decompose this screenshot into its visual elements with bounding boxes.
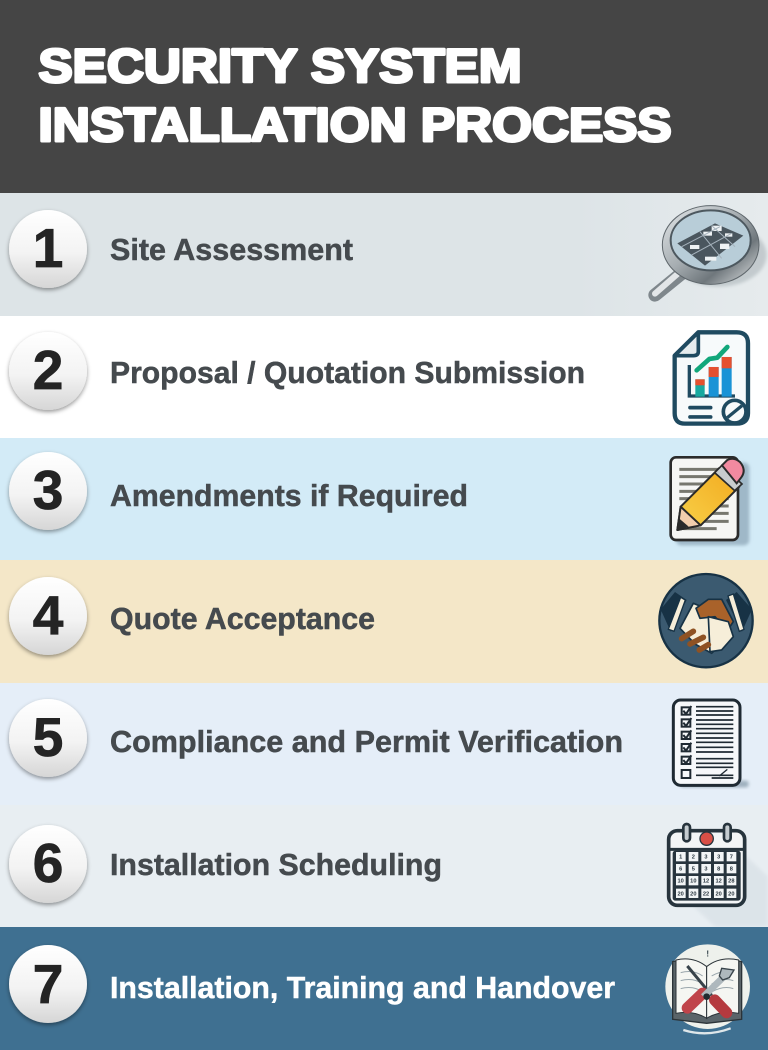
icon: calendar: 20 [690, 891, 696, 897]
icon: calendar: 28 [728, 879, 734, 885]
title: SECURITY SYSTEM [38, 39, 522, 92]
step 1 label: Site Assessment [110, 232, 353, 267]
icon: calendar: 20 [678, 891, 684, 897]
icon: calendar: 10 [678, 879, 684, 885]
icon: pencil on paper [671, 457, 749, 545]
step 3 number badge [9, 452, 87, 530]
icon: calendar: 10 [690, 879, 696, 885]
icon: calendar: 12 [703, 879, 709, 885]
step 1 number badge: 1 [33, 217, 63, 279]
icon: calendar: 20 [716, 891, 722, 897]
icon: calendar: 3 [717, 855, 720, 861]
step 7 label: Installation, Training and Handover [110, 970, 615, 1005]
step 5 number badge: 5 [33, 706, 63, 768]
icon: calendar: 2 [692, 855, 695, 861]
icon: document with bar chart [675, 332, 748, 424]
icon: calendar: 22 [703, 891, 709, 897]
step 2 number badge [9, 332, 87, 410]
panel: step 3 amendments [0, 438, 768, 560]
step 3 label: Amendments if Required [110, 478, 468, 513]
step 4 label: Quote Acceptance [110, 601, 375, 636]
icon: calendar [669, 824, 768, 927]
panel: step 4 quote acceptance [0, 560, 768, 683]
panel: step 7 installation [0, 927, 768, 1050]
icon: calendar: 6 [679, 867, 682, 873]
icon: calendar: 12 [716, 879, 722, 885]
icon: calendar: 8 [717, 867, 720, 873]
panel: step 1 site assessment [0, 193, 768, 316]
step 5 number badge [9, 699, 87, 777]
step 2 number badge: 2 [33, 339, 63, 401]
icon: compliance checklist [673, 700, 749, 787]
panel: step 5 compliance [0, 683, 768, 805]
step 2 label: Proposal / Quotation Submission [110, 355, 585, 390]
step 6 number badge [9, 825, 87, 903]
step 7 number badge [9, 945, 87, 1023]
icon: book with crossed tools [665, 944, 750, 1033]
icon: calendar: 8 [730, 867, 733, 873]
panel: step 6 scheduling [0, 805, 768, 927]
step 6 number badge: 6 [33, 832, 63, 894]
icon: book with crossed tools: ! [706, 949, 709, 959]
icon: calendar: 20 [728, 891, 734, 897]
icon: calendar: 7 [730, 855, 733, 861]
icon: calendar: 3 [704, 867, 708, 873]
step 7 number badge: 7 [33, 953, 63, 1015]
step 6 label: Installation Scheduling [110, 847, 442, 882]
step 5 label: Compliance and Permit Verification [110, 724, 623, 759]
panel: step 2 proposal [0, 316, 768, 438]
title: INSTALLATION PROCESS [38, 98, 672, 151]
step 3 number badge: 3 [33, 459, 63, 521]
icon: calendar: 3 [704, 855, 708, 861]
title [38, 39, 672, 151]
step 1 number badge [9, 210, 87, 288]
icon: handshake [659, 574, 753, 667]
header band [0, 0, 768, 193]
step 4 number badge: 4 [33, 584, 64, 646]
step 4 number badge [9, 577, 87, 655]
icon: calendar: 5 [692, 867, 695, 873]
icon: calendar: 1 [679, 855, 682, 861]
icon: magnifying glass over floor plan [655, 206, 767, 295]
